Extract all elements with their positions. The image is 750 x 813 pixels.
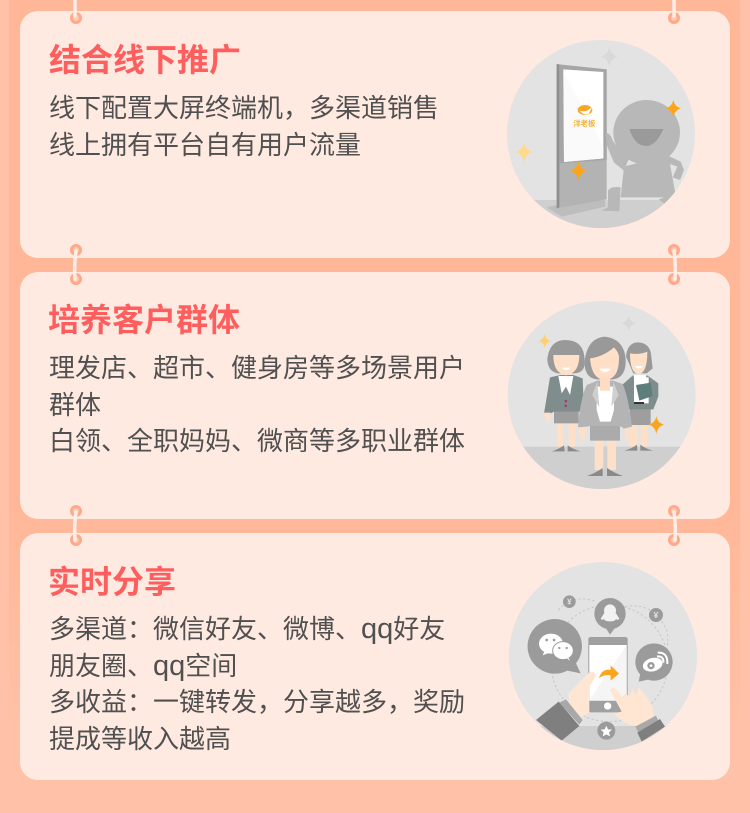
hands — [569, 672, 596, 717]
text block: offline: 线下配置大屏终端机，多渠道销售 — [49, 93, 439, 123]
right woman — [622, 342, 658, 451]
text block: sharing: 提成等收入越高 — [49, 724, 231, 754]
text block: sharing: 朋友圈、qq空间 — [49, 650, 237, 682]
text block: sharing: 多收益：一键转发，分享越多，奖励 — [49, 687, 465, 717]
icon: kiosk and character: 洋老板 — [573, 119, 596, 128]
text block: customers: 白领、全职妈妈、微商等多职业群体 — [49, 426, 465, 456]
heading: customers: 培养客户群体 — [48, 302, 240, 338]
icon: phone sharing network: ¥ — [654, 610, 659, 620]
text block: offline — [49, 93, 439, 160]
text block: sharing: 多渠道：微信好友、微博、qq好友 — [49, 613, 445, 645]
sparkles — [602, 48, 617, 66]
icon: phone sharing network — [509, 562, 697, 750]
panel: offline — [20, 11, 730, 258]
icon: kiosk and character — [507, 40, 695, 228]
binder rings — [72, 0, 678, 544]
character — [621, 155, 684, 197]
icon: three businesswomen — [508, 301, 696, 489]
phone — [588, 637, 628, 712]
panel: customers — [20, 272, 730, 519]
text block: offline: 线上拥有平台自有用户流量 — [49, 130, 361, 160]
logo — [578, 105, 592, 115]
text block: customers: 理发店、超市、健身房等多场景用户 — [49, 353, 465, 383]
icon: phone sharing network: ¥ — [567, 597, 572, 606]
text block: customers — [49, 353, 465, 456]
text block: sharing — [49, 613, 465, 754]
text block: customers: 群体 — [49, 390, 101, 420]
panel: sharing — [20, 533, 730, 780]
left woman — [544, 340, 585, 451]
illustrations and binder rings — [70, 0, 697, 750]
center woman — [578, 337, 632, 476]
heading: offline: 结合线下推广 — [49, 42, 241, 78]
bubbles — [563, 595, 576, 608]
heading: sharing: 实时分享 — [48, 564, 176, 600]
